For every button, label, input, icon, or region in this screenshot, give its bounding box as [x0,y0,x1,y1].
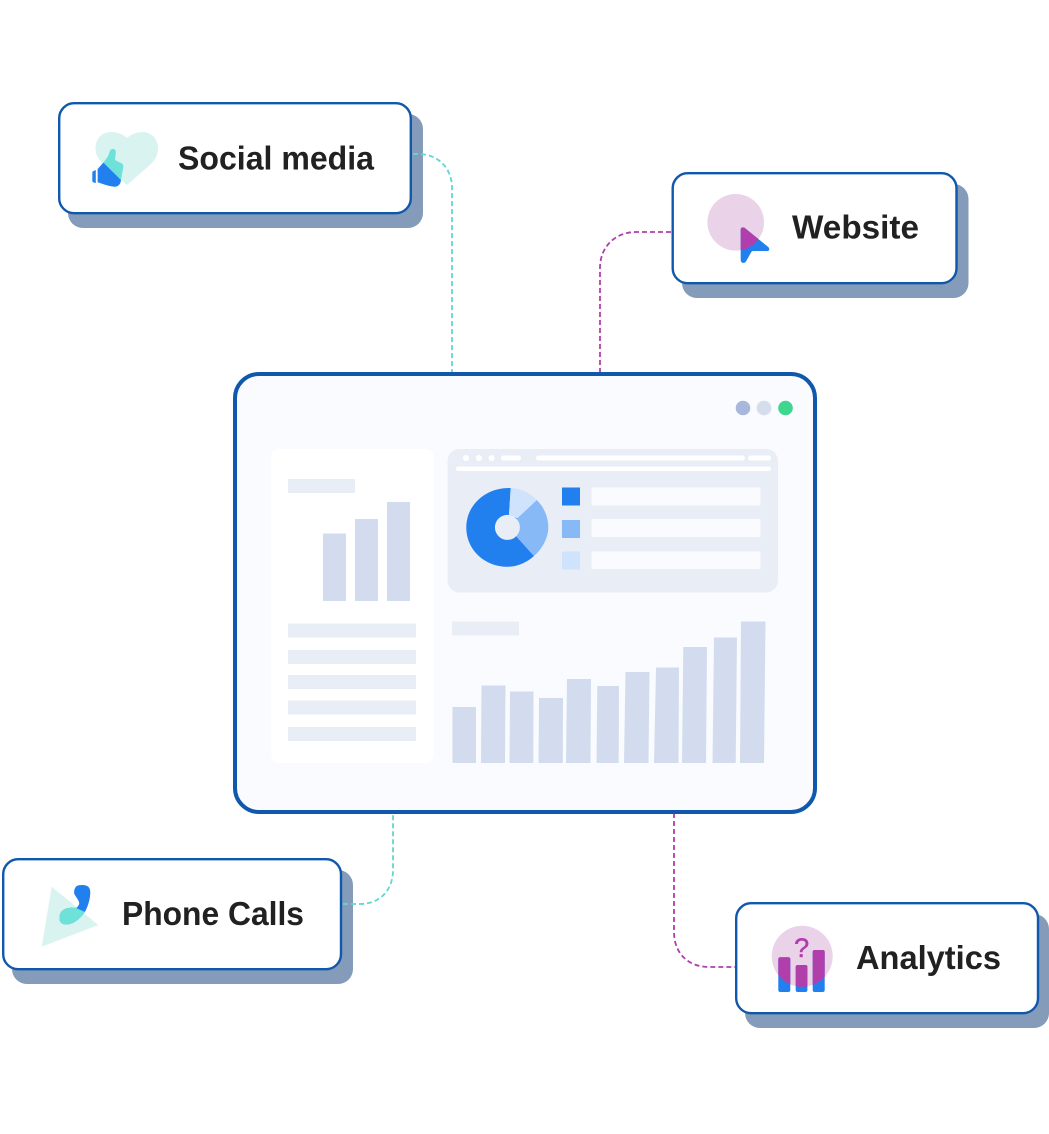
browser toolbar [456,455,771,471]
panel: dashboard window [235,374,815,812]
pie chart [466,488,548,567]
label: Website: Website [792,208,919,246]
connector: social media to dashboard [413,154,452,373]
bottom chart title placeholder [452,622,519,636]
icon: cursor on circle [707,194,769,263]
text line placeholders [288,624,416,741]
card: Phone Calls [3,859,353,984]
label: Social media: Social media [178,140,375,176]
panel: pie chart card [448,449,778,592]
connector: phone calls to dashboard [343,813,393,904]
label: Phone Calls: Phone Calls [122,895,304,932]
connector: analytics to dashboard [674,813,735,967]
panel: left sidebar card [271,449,434,763]
icon: bars with question mark: ? [794,933,809,963]
pie legend [562,488,760,570]
window control dots [736,401,793,415]
connector: website to dashboard [600,232,671,373]
small bar chart [323,502,410,601]
icon: phone handset on triangle [42,885,98,947]
icon: bars with question mark [772,926,833,992]
card: Social media [59,103,423,228]
card: Website [673,173,968,298]
label: Analytics: Analytics [856,939,1001,976]
card: Analytics [736,903,1049,1028]
icon: heart and thumbs up [92,132,158,187]
bar chart [452,622,766,763]
